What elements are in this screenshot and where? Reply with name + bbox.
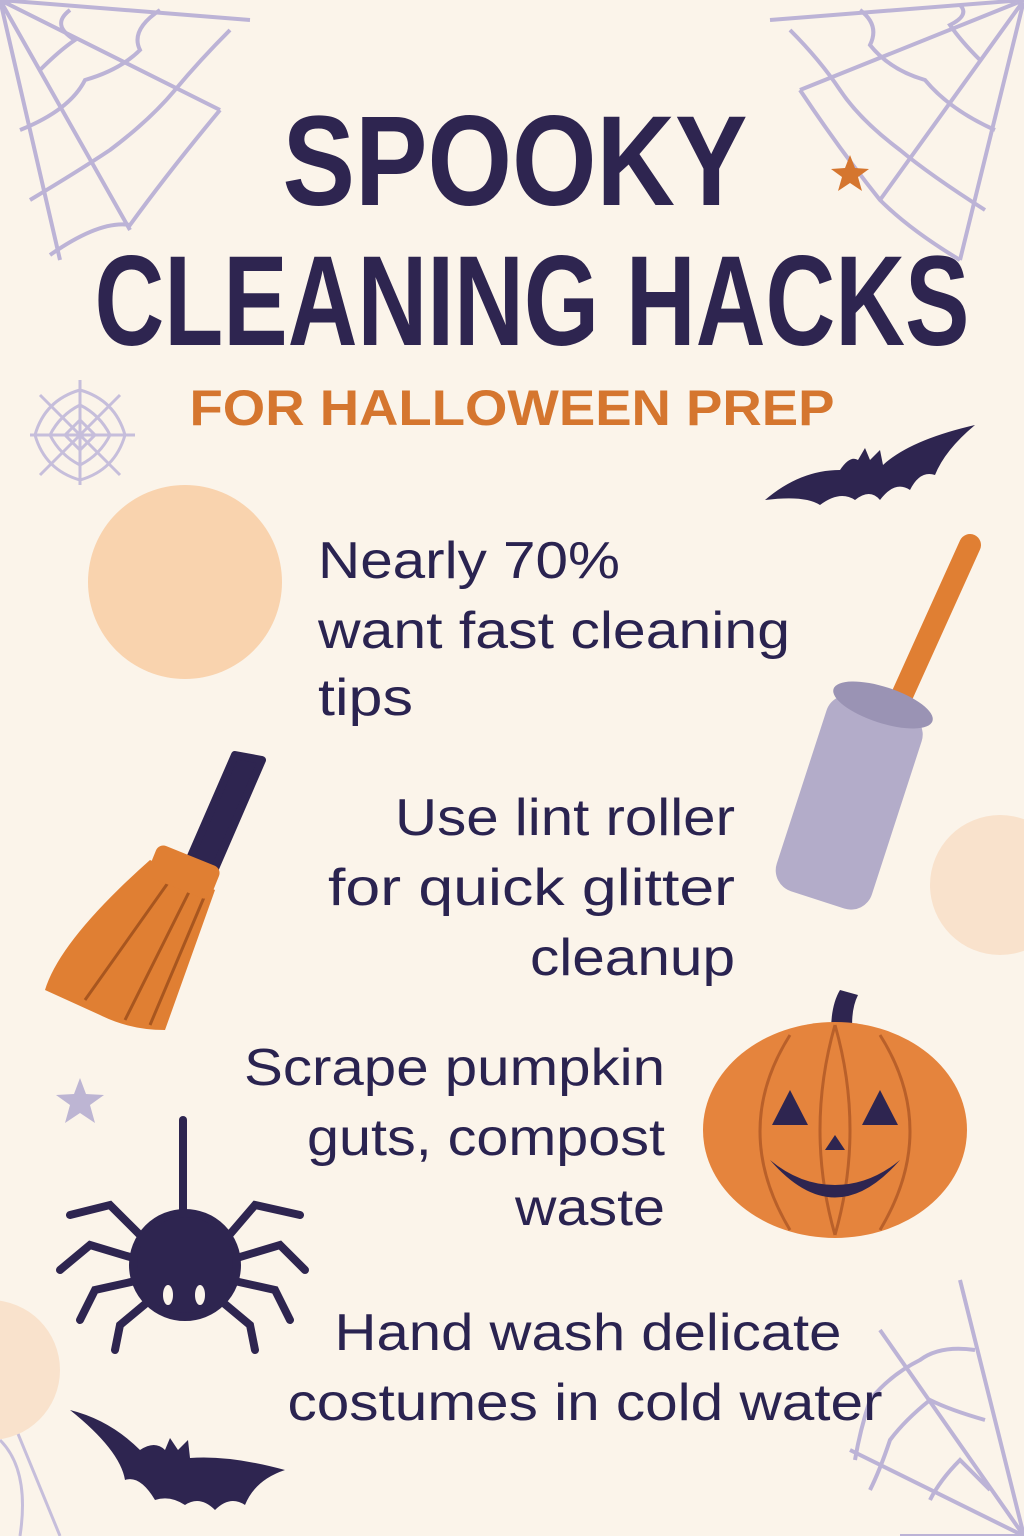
icon: orange star top <box>831 155 869 191</box>
text: tip 2 <box>328 789 735 987</box>
icon: pumpkin <box>703 990 967 1238</box>
subtitle: FOR HALLOWEEN PREP <box>190 380 834 436</box>
text: tip 2: cleanup <box>530 929 735 987</box>
text: tip 4: Hand wash delicate <box>334 1304 842 1362</box>
text: tip 2: for quick glitter <box>328 859 735 917</box>
web: top right corner <box>770 0 1024 260</box>
text: tip 3 <box>244 1039 666 1237</box>
icon: peach circle right <box>930 815 1024 955</box>
icon: bat bottom left <box>70 1410 285 1510</box>
text: tip 1 <box>317 532 790 727</box>
icon: lavender star <box>56 1078 104 1123</box>
icon: peach circle bottom left <box>0 1300 60 1440</box>
text: tip 2: Use lint roller <box>395 789 735 847</box>
text: tip 3: guts, compost <box>307 1109 666 1167</box>
icon: peach circle <box>88 485 282 679</box>
text: tip 4 <box>288 1304 882 1432</box>
text: tip 1: tips <box>318 669 413 727</box>
icon: spider <box>60 1120 305 1350</box>
web: top left corner <box>0 0 250 260</box>
icon: broom <box>45 755 262 1030</box>
web: small left <box>30 380 135 485</box>
text: tip 1: want fast cleaning <box>317 602 790 660</box>
icon: bat top right <box>765 425 975 505</box>
title <box>94 90 970 373</box>
text: tip 1: Nearly 70% <box>318 532 620 590</box>
icon: lint roller <box>770 545 970 915</box>
web: bottom left <box>0 1390 60 1536</box>
title: SPOOKY <box>282 90 748 233</box>
text: tip 3: waste <box>514 1179 665 1237</box>
text: tip 4: costumes in cold water <box>288 1374 882 1432</box>
text: tip 3: Scrape pumpkin <box>244 1039 665 1097</box>
web: bottom right corner <box>850 1280 1024 1536</box>
